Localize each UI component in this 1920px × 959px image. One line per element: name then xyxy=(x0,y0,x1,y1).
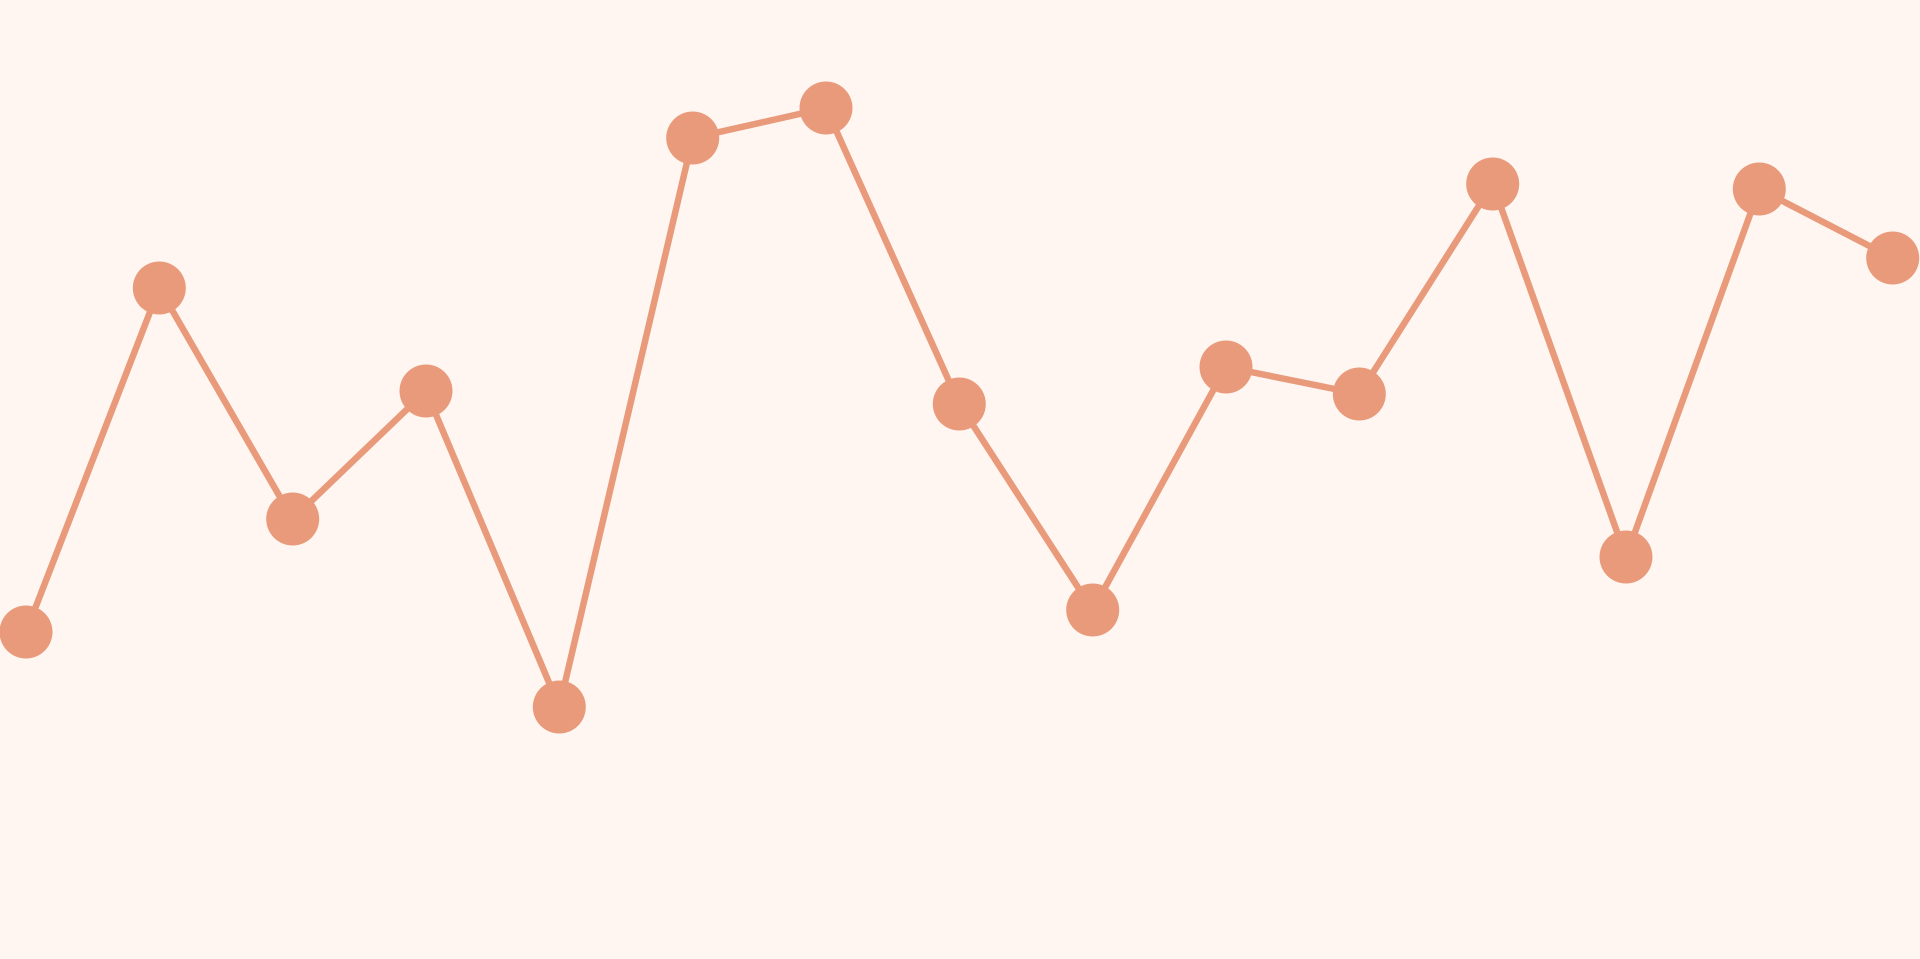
chart line xyxy=(26,108,1893,707)
data points xyxy=(0,82,1919,734)
